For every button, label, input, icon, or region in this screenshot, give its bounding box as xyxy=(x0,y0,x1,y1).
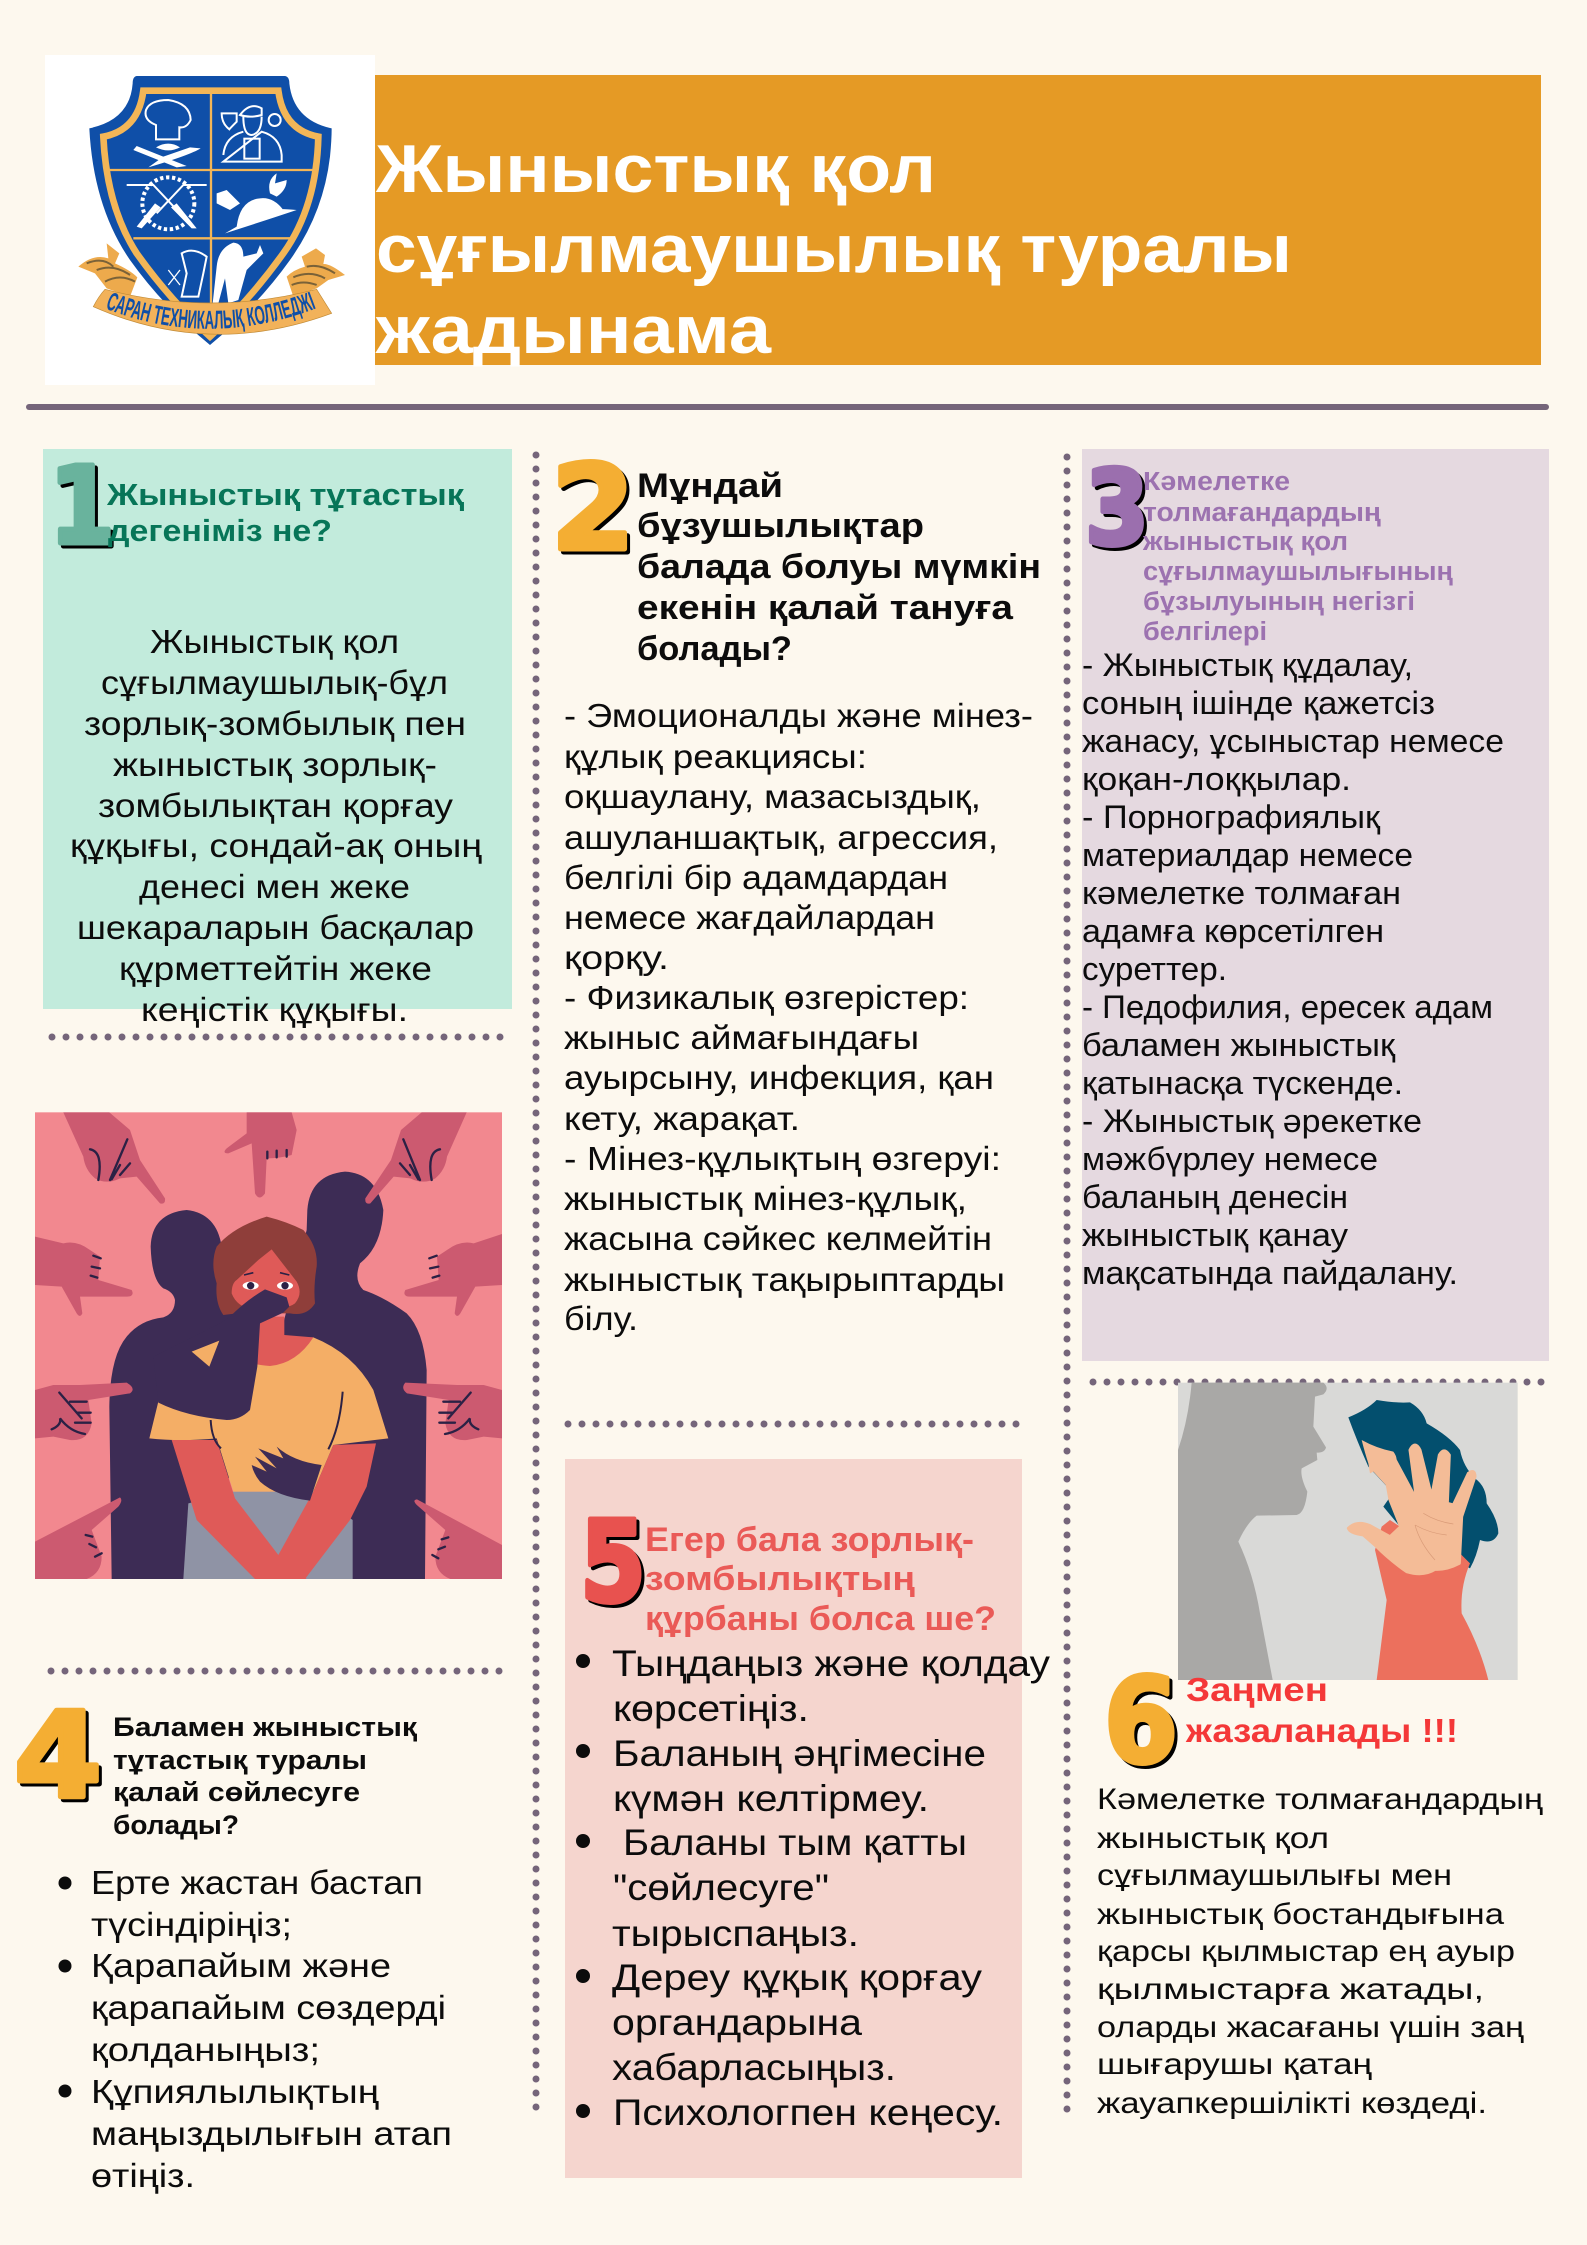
bullet list 5: тырыспаңыз. xyxy=(612,1913,859,1954)
body text 2 xyxy=(564,698,1033,1338)
body text 1: жыныстық зорлық- xyxy=(113,747,437,784)
heading 5: зомбылықтың xyxy=(645,1560,915,1598)
heading 2 xyxy=(637,467,1041,668)
body text 3: - Жыныстық әрекетке xyxy=(1082,1103,1422,1139)
body text 1: шекараларын басқалар xyxy=(77,910,474,947)
title: сұғылмаушылық туралы xyxy=(376,211,1292,287)
heading 6: Заңмен xyxy=(1186,1671,1328,1708)
body text 6: жыныстық қол xyxy=(1097,1822,1329,1855)
body text 2: белгілі бір адамдардан xyxy=(564,860,948,897)
number 5: 5 xyxy=(580,1498,646,1628)
body text 1: денесі мен жеке xyxy=(139,869,410,906)
body text 1: зорлық-зомбылық пен xyxy=(84,706,466,743)
heading 5: құрбаны болса ше? xyxy=(645,1600,996,1638)
heading 2: бұзушылықтар xyxy=(637,507,924,545)
body text 6: сұғылмаушылығы мен xyxy=(1097,1859,1452,1892)
body text 6 xyxy=(1097,1783,1543,2120)
body text 2: құлық реакциясы: xyxy=(564,739,867,776)
body text 1: құқығы, сондай-ақ оның xyxy=(70,828,483,865)
body text 3: - Порнографиялық xyxy=(1082,799,1381,835)
panel 5: if a child becomes a victim xyxy=(565,1459,1051,2178)
body text 6: жыныстық бостандығына xyxy=(1097,1898,1504,1931)
bullet list 4: Құпиялылықтың xyxy=(91,2074,380,2111)
heading 4 xyxy=(113,1712,418,1840)
bullet list 5: хабарласыңыз. xyxy=(612,2047,896,2088)
body text 2: - Мінез-құлықтың өзгеруі: xyxy=(564,1141,1001,1178)
heading 5: Егер бала зорлық- xyxy=(645,1521,974,1559)
body text 6: қарсы қылмыстар ең ауыр xyxy=(1097,1935,1515,1968)
body text 2: қорқу. xyxy=(564,940,669,977)
body text 2: жыныстық мінез-құлық, xyxy=(564,1181,967,1218)
number 6: 6 xyxy=(1104,1652,1178,1790)
body text 6: оларды жасағаны үшін заң xyxy=(1097,2011,1524,2044)
bullet list 5: Баланы тым қатты xyxy=(623,1822,967,1863)
body text 6: шығарушы қатаң xyxy=(1097,2048,1373,2081)
logo: Saran Technical College crest xyxy=(45,55,375,385)
heading 6: жазаланады !!! xyxy=(1185,1712,1458,1749)
title: Жыныстық қол xyxy=(375,131,936,207)
body text 2: немесе жағдайлардан xyxy=(564,900,935,937)
heading 3: жыныстық қол xyxy=(1142,528,1348,556)
heading 4: Баламен жыныстық xyxy=(113,1712,418,1742)
heading 4: болады? xyxy=(113,1810,239,1840)
body text 3: мақсатында пайдалану. xyxy=(1082,1255,1458,1291)
title xyxy=(375,131,1292,368)
bullet list 4: Ерте жастан бастап xyxy=(91,1865,423,1902)
heading 2: Мұндай xyxy=(637,467,783,505)
body text 6: Кәмелетке толмағандардың xyxy=(1097,1783,1543,1816)
body text 3: қатынасқа түскенде. xyxy=(1082,1065,1403,1101)
bullet list 4: Қарапайым және xyxy=(91,1948,391,1985)
body text 3: қоқан-лоққылар. xyxy=(1082,761,1351,797)
heading 3: белгілері xyxy=(1143,618,1267,646)
bullet list 5: күмән келтірмеу. xyxy=(613,1778,929,1819)
body text 2: кету, жарақат. xyxy=(564,1101,800,1138)
body text 3: жанасу, ұсыныстар немесе xyxy=(1082,723,1504,759)
title: жадынама xyxy=(375,292,772,368)
heading 3 xyxy=(1142,468,1454,646)
bullet list 4 xyxy=(58,1865,452,2195)
heading 4: қалай сөйлесуге xyxy=(113,1777,360,1807)
body text 3: баламен жыныстық xyxy=(1082,1027,1396,1063)
heading 6 xyxy=(1185,1671,1458,1749)
body text 3: жыныстық қанау xyxy=(1082,1217,1349,1253)
body text 1: кеңістік құқығы. xyxy=(141,992,408,1029)
bullet list 5: органдарына xyxy=(612,2002,862,2043)
bullet list 4: түсіндіріңіз; xyxy=(91,1907,292,1944)
body text 2: - Физикалық өзгерістер: xyxy=(564,980,969,1017)
illustration: woman raising a hand against a shouting shadow xyxy=(1178,1383,1518,1680)
body text 1: құрметтейтін жеке xyxy=(119,951,432,988)
body text 6: жауапкершілікті көздеді. xyxy=(1097,2087,1487,2120)
body text 3: - Педофилия, ересек адам xyxy=(1082,989,1493,1025)
bullet list 5: Тыңдаңыз және қолдау xyxy=(612,1643,1051,1684)
bullet list 5: Психологпен кеңесу. xyxy=(613,2092,1003,2133)
body text 1: сұғылмаушылық-бұл xyxy=(101,665,448,702)
heading 4: тұтастық туралы xyxy=(113,1745,367,1775)
heading 1: Жыныстық тұтастық xyxy=(106,477,465,512)
panel 6: punishable by law xyxy=(1097,1652,1543,2120)
bullet list 4: өтіңіз. xyxy=(91,2158,195,2195)
illustration: silenced girl surrounded by pointing hands xyxy=(35,1112,502,1579)
bullet list 5: көрсетіңіз. xyxy=(613,1688,809,1729)
number 4: 4 xyxy=(14,1688,102,1826)
body text 3: материалдар немесе xyxy=(1082,837,1413,873)
body text 2: - Эмоционалды және мінез- xyxy=(564,698,1033,735)
body text 3: суреттер. xyxy=(1082,951,1227,987)
orange title band xyxy=(375,75,1541,365)
body text 2: жыныс аймағындағы xyxy=(564,1020,919,1057)
heading 3: толмағандардың xyxy=(1143,499,1382,527)
body text 6: қылмыстарға жатады, xyxy=(1097,1973,1484,2006)
heading 2: балада болуы мүмкін xyxy=(637,548,1041,586)
heading 3: бұзылуының негізгі xyxy=(1143,588,1415,616)
bullet list 5: "сөйлесуге" xyxy=(613,1867,829,1908)
body text 1 xyxy=(70,624,483,1029)
panel 2: how to recognize violations xyxy=(551,439,1041,1338)
heading 5 xyxy=(645,1521,996,1638)
number 3: 3 xyxy=(1085,449,1149,569)
body text 2: жасына сәйкес келмейтін xyxy=(564,1221,992,1258)
body text 1: зомбылықтан қорғау xyxy=(98,788,453,825)
bullet list 4: қолданыңыз; xyxy=(91,2032,320,2069)
body text 3: адамға көрсетілген xyxy=(1082,913,1384,949)
body text 3: мәжбүрлеу немесе xyxy=(1082,1141,1378,1177)
body text 2: жыныстық тақырыптарды xyxy=(564,1262,1005,1299)
bullet list 5: Дереу құқық қорғау xyxy=(612,1957,983,1998)
number 2: 2 xyxy=(551,439,635,577)
heading 2: болады? xyxy=(637,630,792,668)
body text 3 xyxy=(1082,647,1504,1291)
heading 1 xyxy=(106,477,465,548)
panel 3: main signs of violation xyxy=(1082,449,1549,1361)
number 1: 1 xyxy=(49,445,115,569)
panel 4: how to talk to a child xyxy=(14,1688,452,2195)
body text 3: баланың денесін xyxy=(1082,1179,1348,1215)
heading 3: сұғылмаушылығының xyxy=(1143,558,1454,586)
bullet list 4: маңыздылығын атап xyxy=(91,2116,452,2153)
body text 2: оқшаулану, мазасыздық, xyxy=(564,779,981,816)
panel 1: what is sexual integrity xyxy=(43,445,512,1029)
body text 2: ашуланшақтық, агрессия, xyxy=(564,820,998,857)
bullet list 5: Баланың әңгімесіне xyxy=(613,1733,986,1774)
body text 3: кәмелетке толмаған xyxy=(1082,875,1401,911)
heading 1: дегеніміз не? xyxy=(108,513,332,548)
heading 3: Кәмелетке xyxy=(1143,468,1290,496)
body text 3: соның ішінде қажетсіз xyxy=(1082,685,1435,721)
body text 2: ауырсыну, инфекция, қан xyxy=(564,1060,994,1097)
bullet list 4: қарапайым сөздерді xyxy=(91,1990,446,2027)
body text 3: - Жыныстық құдалау, xyxy=(1082,647,1413,683)
header banner xyxy=(45,55,1541,385)
heading 2: екенін қалай тануға xyxy=(637,589,1014,627)
body text 1: Жыныстық қол xyxy=(150,624,399,661)
body text 2: білу. xyxy=(564,1301,638,1338)
logo: Saran Technical College crest: САРАН ТЕХНИКАЛЫҚ КОЛЛЕДЖІ xyxy=(107,292,316,332)
bullet list 5 xyxy=(576,1643,1051,2133)
